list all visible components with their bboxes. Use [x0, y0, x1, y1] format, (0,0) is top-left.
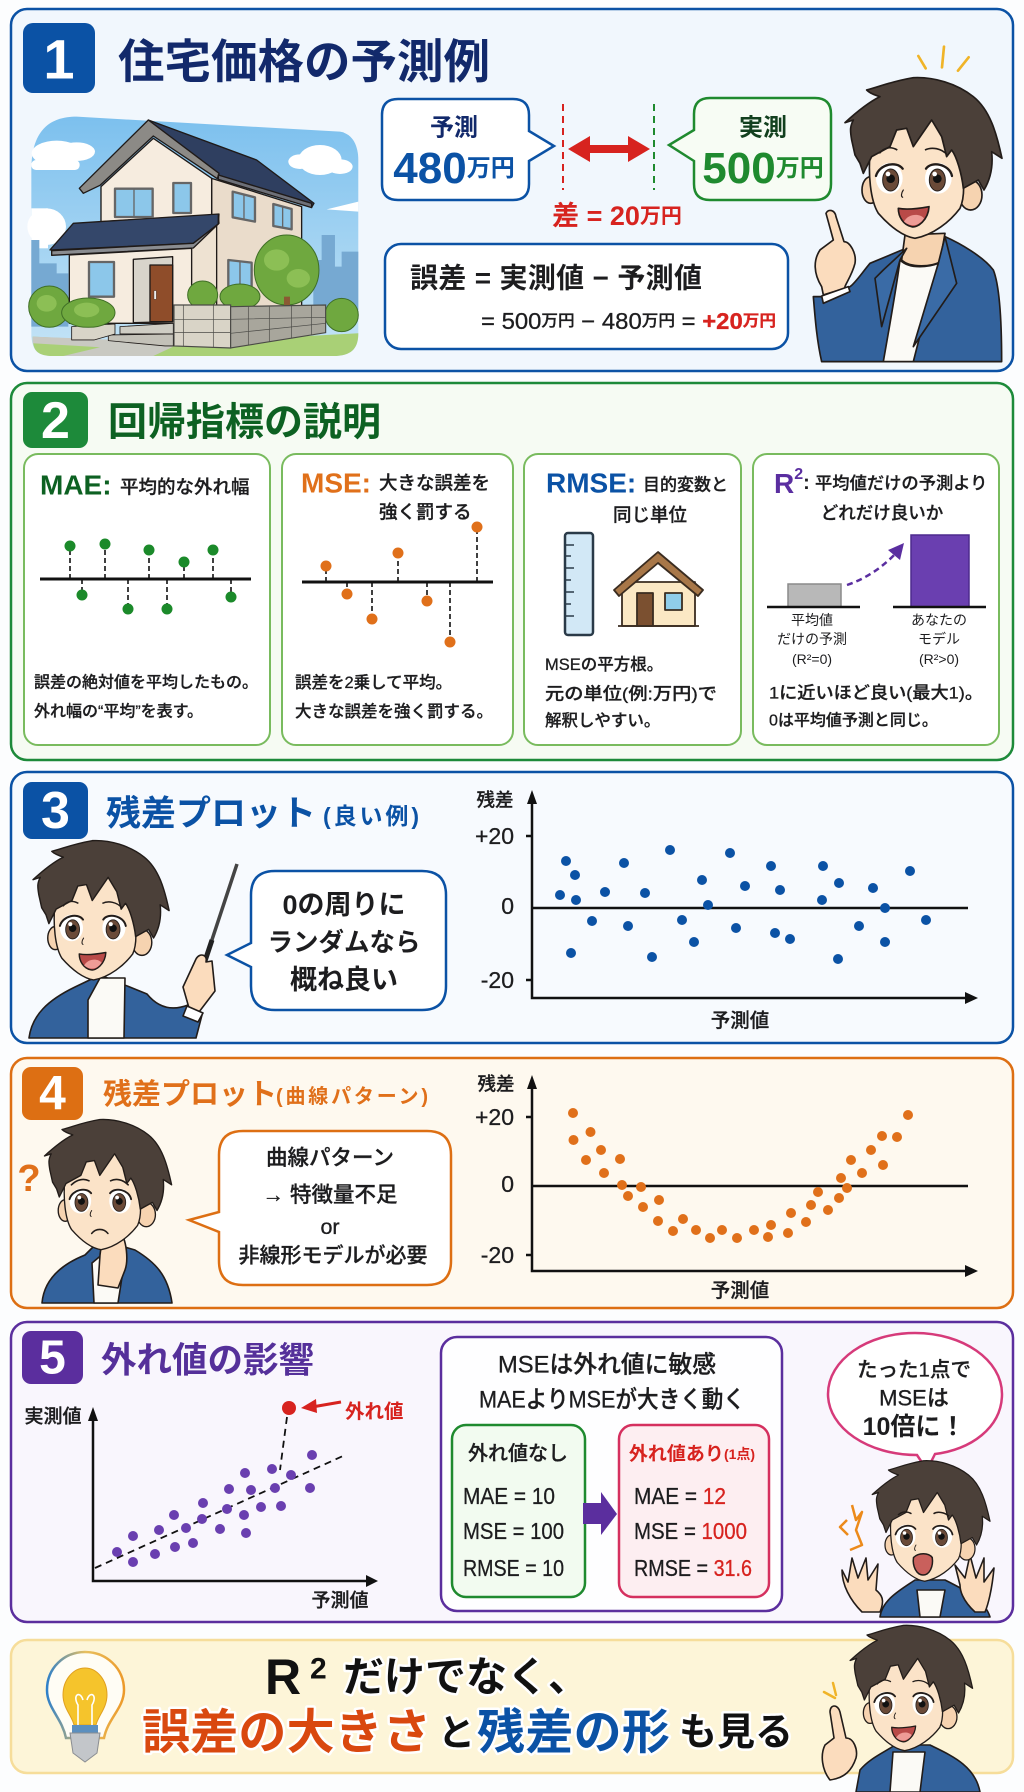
character with pointer [29, 841, 237, 1038]
card: MSE: 誤差を2乗して平均。 [295, 673, 452, 692]
heading: residual good: (良い例) [323, 803, 419, 829]
badge 1: 1 [43, 28, 75, 90]
chart: baseline vs your model [767, 535, 986, 667]
card: MAE: 平均的な外れ幅 [120, 476, 250, 498]
chart: baseline vs your model: あなたの [911, 612, 967, 628]
icon: question mark: ? [17, 1158, 41, 1200]
speech bubble: random around zero: ランダムなら [267, 928, 421, 957]
badge 3: 3 [41, 782, 70, 840]
box: with outlier [619, 1425, 769, 1597]
card: RMSE: 目的変数と [643, 476, 728, 494]
card: RMSE: MSEの平方根。 [545, 655, 663, 674]
bubble: predicted [382, 99, 554, 200]
character: thinking [42, 1119, 172, 1303]
speech bubble: ten times: MSEは [879, 1386, 949, 1410]
takeaway line 1 [265, 1649, 589, 1705]
card: MSE: MSE: [301, 468, 371, 498]
card: MAE: 誤差の絶対値を平均したもの。 [34, 674, 258, 692]
bubble: predicted: 予測 [430, 114, 478, 142]
heading: residual curved [103, 1078, 428, 1111]
badge 1 [23, 23, 95, 93]
badge 5 [22, 1331, 83, 1384]
takeaway line 2: も見る [679, 1712, 793, 1754]
difference marker: dashed lines and double arrow [563, 104, 654, 190]
speech bubble: ten times: たった1点で [857, 1358, 971, 1382]
card: RMSE: 元の単位(例:万円)で [545, 684, 717, 704]
takeaway line 2: 残差の形 [477, 1706, 670, 1760]
scatter: U-shaped residuals: 予測値 [711, 1280, 769, 1302]
bubble: predicted: 480万円 [393, 144, 515, 192]
heading: outlier: 外れ値の影響 [101, 1340, 314, 1380]
card: R squared: どれだけ良いか [821, 503, 943, 523]
icon: light bulb [47, 1652, 124, 1762]
scatter: random residuals: +20 [475, 823, 514, 849]
character: pointing up, closing [822, 1625, 980, 1792]
badge 2: 2 [41, 392, 70, 450]
scatter: random residuals: -20 [481, 967, 514, 993]
scatter: outlier chart: 実測値 [24, 1406, 82, 1428]
card: R squared: 平均値だけの予測より [815, 473, 987, 493]
chart: baseline vs your model: (R²>0) [919, 651, 959, 667]
takeaway line 1: R [265, 1649, 301, 1705]
bubble: actual: 500万円 [702, 144, 824, 192]
chart: squared errors [302, 522, 493, 648]
scatter: U-shaped residuals: 残差 [477, 1074, 515, 1094]
badge 5: 5 [39, 1332, 66, 1384]
box: without outlier: RMSE = 10 [463, 1555, 564, 1581]
character: pointing up [813, 47, 1002, 362]
chart: absolute errors [40, 538, 251, 614]
formula box [385, 244, 788, 349]
card: RMSE [524, 454, 741, 745]
speech bubble: ten times [828, 1333, 1002, 1470]
scatter: U-shaped residuals: +20 [475, 1104, 514, 1130]
card: MAE: MAE: [40, 470, 112, 500]
panel 2: regression metrics [11, 383, 1013, 760]
panel 1: house price example [11, 9, 1013, 371]
heading: house price: 住宅価格の予測例 [118, 36, 490, 88]
box: without outlier: MSE = 100 [463, 1518, 564, 1544]
badge 4 [22, 1067, 83, 1120]
card: R squared: R [774, 468, 794, 498]
card: R squared [753, 454, 999, 745]
box: with outlier: RMSE = 31.6 [634, 1555, 752, 1581]
card: R squared: : [803, 472, 810, 494]
scatter: U-shaped residuals [475, 1074, 978, 1302]
formula box: = 500万円 − 480万円 = +20万円 [481, 308, 776, 334]
outlier point and arrow: 外れ値 [345, 1401, 404, 1423]
card: RMSE: RMSE: [546, 468, 636, 498]
badge 3 [23, 782, 88, 840]
box: with outlier: 外れ値あり(1点) [629, 1442, 755, 1464]
speech bubble: curve pattern: → 特徴量不足 [263, 1183, 397, 1207]
speech bubble: random around zero: 0の周りに [282, 890, 406, 920]
card: R squared: 1に近いほど良い(最大1)。 [769, 684, 983, 702]
scatter: U-shaped residuals: 0 [501, 1171, 514, 1197]
card: R squared: 2 [794, 466, 803, 482]
speech bubble: curve pattern [189, 1131, 451, 1285]
heading: residual curved: (曲線パターン) [276, 1085, 428, 1108]
heading: residual good: 残差プロット [106, 794, 316, 834]
heading: residual good [106, 794, 419, 834]
scatter: outlier chart: 予測値 [311, 1590, 369, 1612]
card: MSE: 強く罰する [379, 502, 472, 522]
chart: baseline vs your model: だけの予測 [777, 631, 847, 647]
chart: baseline vs your model: モデル [918, 631, 960, 647]
scatter: random residuals: 残差 [476, 790, 514, 810]
heading: residual curved: 残差プロット [103, 1078, 277, 1111]
scatter: U-shaped residuals: -20 [481, 1242, 514, 1268]
takeaway line 1: 2 [310, 1652, 327, 1686]
icon: ruler [565, 533, 593, 635]
scatter: outlier chart [24, 1399, 404, 1612]
arrow: to with outlier [583, 1492, 617, 1535]
comparison box: MAEよりMSEが大きく動く [479, 1386, 745, 1414]
takeaway line 2 [142, 1706, 793, 1760]
card: RMSE: 解釈しやすい。 [545, 711, 660, 730]
heading: metrics: 回帰指標の説明 [108, 402, 381, 444]
comparison box: MSEは外れ値に敏感 [498, 1350, 716, 1378]
box: without outlier [452, 1425, 585, 1597]
box: without outlier: 外れ値なし [468, 1442, 568, 1465]
speech bubble: curve pattern: or [320, 1215, 340, 1239]
speech bubble: random around zero: 概ね良い [290, 965, 398, 995]
box: without outlier: MAE = 10 [463, 1483, 555, 1509]
takeaway line 2: 誤差の大きさ [142, 1706, 431, 1760]
card: MSE: 大きな誤差を強く罰する。 [295, 702, 493, 721]
chart: baseline vs your model: 平均値 [791, 612, 833, 628]
scatter: random residuals: 予測値 [711, 1010, 769, 1032]
badge 2 [23, 392, 88, 450]
speech bubble: ten times: 10倍に！ [863, 1413, 965, 1441]
speech bubble: curve pattern: 曲線パターン [266, 1146, 394, 1170]
speech bubble: random around zero [227, 871, 446, 1010]
panel 6: takeaway banner [11, 1625, 1013, 1792]
comparison box [441, 1337, 782, 1611]
panel 4: residual plot curved [11, 1058, 1013, 1308]
box: with outlier: MSE = 1000 [634, 1518, 747, 1544]
icon: small house [614, 552, 703, 626]
card: RMSE: 同じ単位 [613, 504, 687, 526]
card: MAE [24, 454, 270, 745]
takeaway line 1: だけでなく、 [343, 1654, 589, 1700]
scatter: random residuals: 0 [501, 893, 514, 919]
card: MSE: 大きな誤差を [379, 472, 490, 494]
chart: baseline vs your model: (R²=0) [792, 651, 832, 667]
card: R squared: 0は平均値予測と同じ。 [769, 712, 938, 730]
speech bubble: curve pattern: 非線形モデルが必要 [238, 1244, 428, 1268]
card: MSE [282, 454, 513, 745]
outlier point and arrow [282, 1399, 404, 1423]
illustration: house [27, 117, 358, 356]
badge 4: 4 [39, 1068, 66, 1120]
character: surprised [840, 1461, 994, 1617]
scatter: random residuals [475, 790, 978, 1032]
panel 3: residual plot good [11, 772, 1013, 1043]
box: with outlier: MAE = 12 [634, 1483, 726, 1509]
formula box: 誤差 = 実測値 − 予測値 [410, 262, 702, 294]
takeaway line 2: と [438, 1712, 475, 1754]
bubble: actual [669, 98, 831, 200]
bubble: actual: 実測 [739, 114, 787, 142]
card: MAE: 外れ幅の“平均”を表す。 [34, 702, 203, 720]
panel 5: outlier impact [11, 1322, 1013, 1622]
difference label: 差 = 20万円 [552, 201, 682, 231]
